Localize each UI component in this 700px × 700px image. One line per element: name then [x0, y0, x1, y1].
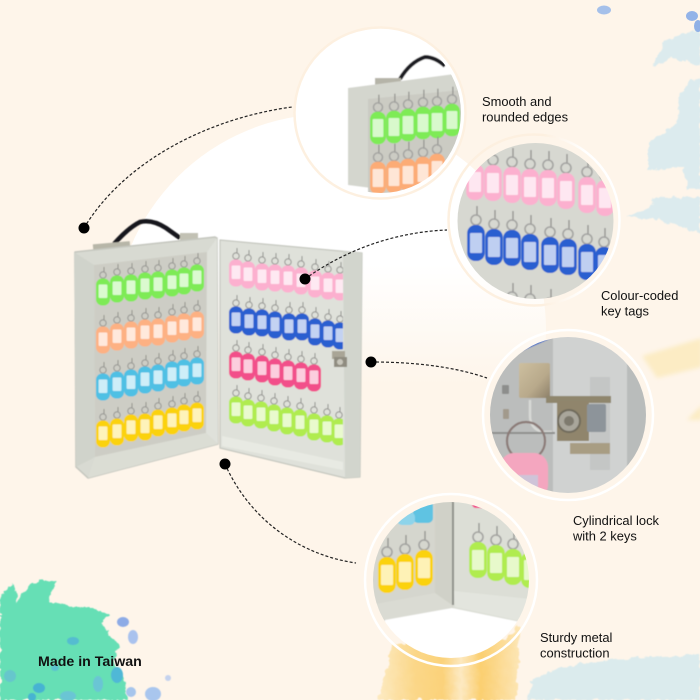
lime tags row [229, 385, 346, 446]
brush strokes: yellow bottom centre [378, 625, 520, 700]
label: sturdy metal construction: construction [540, 646, 610, 660]
ring [294, 28, 466, 198]
brush strokes: yellow right [642, 338, 700, 420]
orange tags row [96, 300, 204, 354]
left cabinet key tags [96, 253, 204, 448]
connector: base dot to fourth callout [220, 458, 356, 563]
yellow tags row [96, 391, 204, 448]
label: colour-coded key tags: key tags [601, 304, 649, 318]
cyan tags row [96, 346, 204, 400]
label: smooth and rounded edges: Smooth and [482, 94, 552, 109]
connector: door dot to second callout [300, 230, 447, 284]
right door body [220, 240, 362, 478]
label: cylindrical lock: Cylindrical lock [573, 513, 659, 528]
callout: sturdy metal construction [365, 494, 540, 670]
white circle behind product [132, 117, 546, 338]
brush strokes: blue bottom right [528, 655, 700, 700]
connector: top left dot to first callout [78, 107, 292, 234]
brush strokes: blue top right [597, 6, 700, 233]
label: colour-coded key tags: Colour-coded [601, 288, 678, 303]
ring [448, 134, 620, 306]
brush strokes: green and blue bottom left [0, 580, 171, 700]
label: cylindrical lock: with 2 keys [572, 528, 637, 544]
zoom image: tag rows [458, 143, 614, 299]
zoom image: hinge and base [373, 502, 529, 658]
label: made in Taiwan: Made in Taiwan [38, 654, 142, 670]
zoom image: cabinet corner [348, 54, 461, 193]
connector: lock dot to third callout [366, 356, 487, 378]
green tags row [96, 253, 204, 306]
product: open key cabinet [74, 221, 362, 478]
cabinet handle [93, 221, 198, 251]
ring [483, 330, 653, 500]
right door key tags [229, 248, 347, 446]
hot pink tags row [229, 340, 321, 392]
label: sturdy metal construction: Sturdy metal [540, 630, 612, 645]
blue tags row [229, 295, 347, 350]
callout: cylindrical lock [483, 330, 655, 502]
ring [365, 494, 537, 666]
callout: colour-coded key tags [447, 134, 621, 307]
door lock [332, 351, 347, 367]
left cabinet body [74, 237, 218, 478]
callout: smooth and rounded edges [294, 28, 466, 200]
light pink tags row [229, 248, 347, 300]
label: smooth and rounded edges: rounded edges [482, 110, 568, 124]
zoom image: lock close-up [490, 337, 646, 493]
